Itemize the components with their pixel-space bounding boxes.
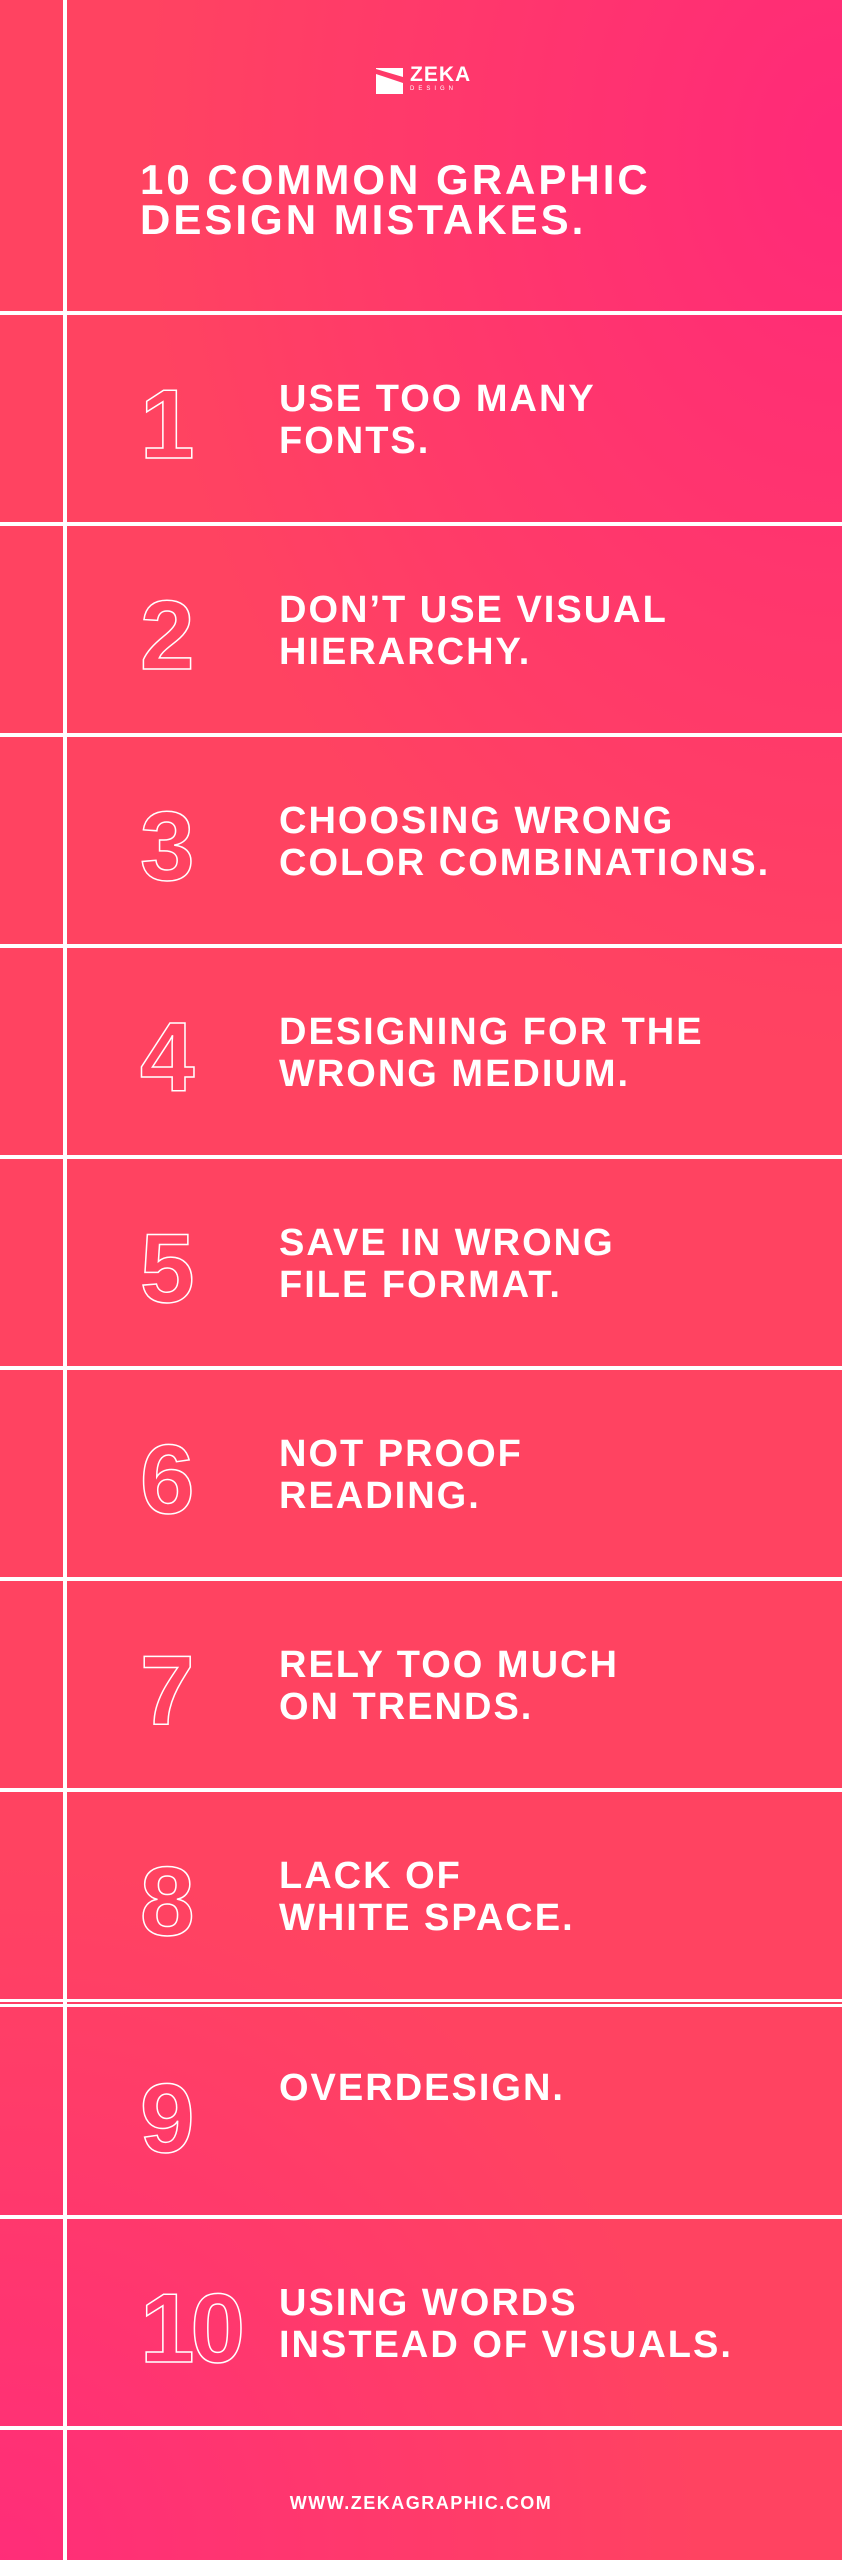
number 3: 3 xyxy=(140,793,195,901)
text 5 xyxy=(279,1222,615,1306)
text 5: SAVE IN WRONG xyxy=(279,1222,615,1264)
item 5 xyxy=(140,1215,615,1323)
number 10: 10 xyxy=(140,2275,242,2383)
number 2: 2 xyxy=(140,582,195,690)
number 9: 9 xyxy=(140,2065,195,2173)
title: 10 COMMON GRAPHIC xyxy=(140,156,651,203)
item 9 xyxy=(140,2065,565,2173)
number 4: 4 xyxy=(140,1004,195,1112)
text 6 xyxy=(279,1433,523,1517)
item 4 xyxy=(140,1004,704,1112)
text 6: NOT PROOF xyxy=(279,1433,523,1475)
number 5: 5 xyxy=(140,1215,195,1323)
text 7: ON TRENDS. xyxy=(279,1686,533,1728)
item 6 xyxy=(140,1426,523,1534)
footer url: WWW.ZEKAGRAPHIC.COM xyxy=(290,2493,552,2513)
text 1: USE TOO MANY xyxy=(279,378,596,420)
text 7: RELY TOO MUCH xyxy=(279,1644,619,1686)
text 10: USING WORDS xyxy=(279,2282,578,2324)
text 6: READING. xyxy=(279,1475,481,1517)
text 1 xyxy=(279,378,596,462)
text 2 xyxy=(279,589,668,673)
icon: logo mark xyxy=(376,68,403,94)
title xyxy=(140,156,651,243)
number 8: 8 xyxy=(140,1848,195,1956)
item 1 xyxy=(140,371,596,479)
text 4: DESIGNING FOR THE xyxy=(279,1011,704,1053)
logo text: DESIGN xyxy=(410,86,457,92)
text 7 xyxy=(279,1644,619,1728)
number 7: 7 xyxy=(140,1637,195,1745)
title: DESIGN MISTAKES. xyxy=(140,196,586,243)
text 3: COLOR COMBINATIONS. xyxy=(279,842,770,884)
text 1: FONTS. xyxy=(279,420,430,462)
text 2: HIERARCHY. xyxy=(279,631,531,673)
logo xyxy=(376,63,471,94)
item 3 xyxy=(140,793,770,901)
item 7 xyxy=(140,1637,619,1745)
text 4 xyxy=(279,1011,704,1095)
item 10 xyxy=(140,2275,733,2383)
number 1: 1 xyxy=(140,371,195,479)
text 10 xyxy=(279,2282,733,2366)
text 5: FILE FORMAT. xyxy=(279,1264,562,1306)
number 6: 6 xyxy=(140,1426,195,1534)
item 2 xyxy=(140,582,668,690)
text 9: OVERDESIGN. xyxy=(279,2067,565,2109)
text 10: INSTEAD OF VISUALS. xyxy=(279,2324,733,2366)
item 8 xyxy=(140,1848,575,1956)
text 2: DON’T USE VISUAL xyxy=(279,589,668,631)
text 4: WRONG MEDIUM. xyxy=(279,1053,630,1095)
text 8 xyxy=(279,1855,575,1939)
text 3: CHOOSING WRONG xyxy=(279,800,674,842)
logo text: ZEKA xyxy=(410,63,471,86)
text 8: LACK OF xyxy=(279,1855,462,1897)
text 3 xyxy=(279,800,770,884)
text 8: WHITE SPACE. xyxy=(279,1897,575,1939)
